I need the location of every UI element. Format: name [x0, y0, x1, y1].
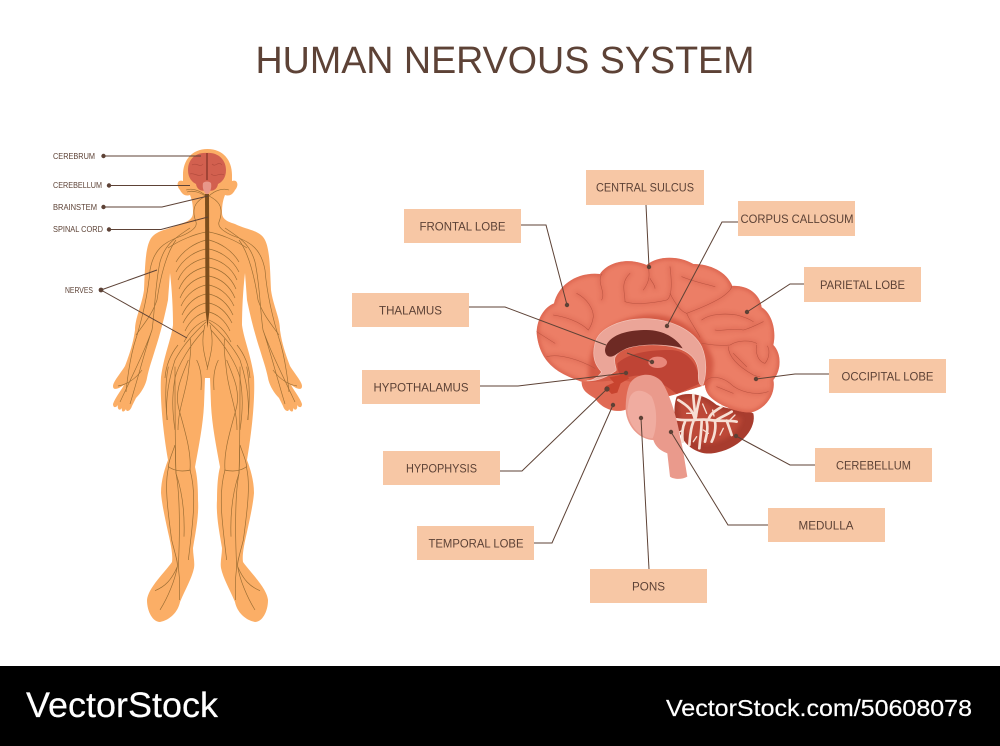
label box: cerebellum: CEREBELLUM: [836, 460, 911, 472]
label box: hypophysis: HYPOPHYSIS: [406, 464, 477, 476]
footer band: [0, 666, 1000, 746]
brain labels: [352, 170, 946, 603]
label box: medulla: MEDULLA: [798, 520, 854, 532]
brain leaders: [469, 205, 829, 569]
label box: thalamus: THALAMUS: [379, 306, 442, 318]
label box: hypophysis: [383, 451, 500, 485]
label box: central sulcus: CENTRAL SULCUS: [596, 182, 694, 194]
human body figure with nerves: [113, 149, 302, 622]
label box: frontal lobe: [404, 209, 521, 243]
label box: frontal lobe: FRONTAL LOBE: [420, 222, 506, 234]
label box: hypothalamus: [362, 370, 480, 404]
brain diagram: [537, 258, 780, 479]
inner region: [617, 350, 700, 394]
label: cerebrum: CEREBRUM: [53, 152, 95, 161]
shaded band round inner structures: [588, 315, 714, 404]
ventricle: [605, 330, 683, 357]
spinal cord: [205, 194, 210, 328]
cerebellum: [674, 394, 754, 454]
label: brainstem: [53, 196, 208, 212]
brainstem: [626, 375, 687, 479]
label box: temporal lobe: TEMPORAL LOBE: [428, 538, 524, 550]
hypophysis: [604, 374, 629, 394]
small brain in head: [188, 153, 226, 195]
footer logo text: VectorStock: [26, 686, 219, 725]
label box: parietal lobe: PARIETAL LOBE: [820, 280, 905, 292]
label box: cerebellum: [815, 448, 932, 482]
label box: parietal lobe: [804, 267, 921, 302]
label: spinal cord: [53, 217, 208, 234]
label box: pons: [590, 569, 707, 603]
cerebrum: [537, 258, 780, 412]
label box: temporal lobe: [417, 526, 534, 560]
label box: medulla: [768, 508, 885, 542]
label: cerebrum: [53, 152, 201, 161]
label: cerebellum: CEREBELLUM: [53, 181, 102, 190]
label box: central sulcus: [586, 170, 704, 205]
label: brainstem: BRAINSTEM: [53, 203, 97, 212]
label box: occipital lobe: OCCIPITAL LOBE: [842, 372, 934, 384]
footer url text: VectorStock.com/50608078: [666, 695, 972, 721]
label box: thalamus: [352, 293, 469, 327]
leader dots: [565, 265, 758, 438]
label: cerebellum: [53, 181, 190, 190]
label box: occipital lobe: [829, 359, 946, 393]
label: spinal cord: SPINAL CORD: [53, 225, 103, 234]
label: nerves: NERVES: [65, 286, 93, 295]
label box: hypothalamus: HYPOTHALAMUS: [374, 382, 469, 394]
gyri lines: [537, 267, 769, 393]
labels for body: [53, 152, 208, 338]
label: nerves: [65, 270, 187, 338]
label box: corpus callosum: CORPUS CALLOSUM: [740, 214, 854, 226]
label box: corpus callosum: [738, 201, 855, 236]
thalamus nucleus: [648, 357, 667, 368]
label box: pons: PONS: [632, 582, 665, 594]
corpus callosum: [587, 319, 706, 386]
title: HUMAN NERVOUS SYSTEM: [256, 40, 754, 82]
